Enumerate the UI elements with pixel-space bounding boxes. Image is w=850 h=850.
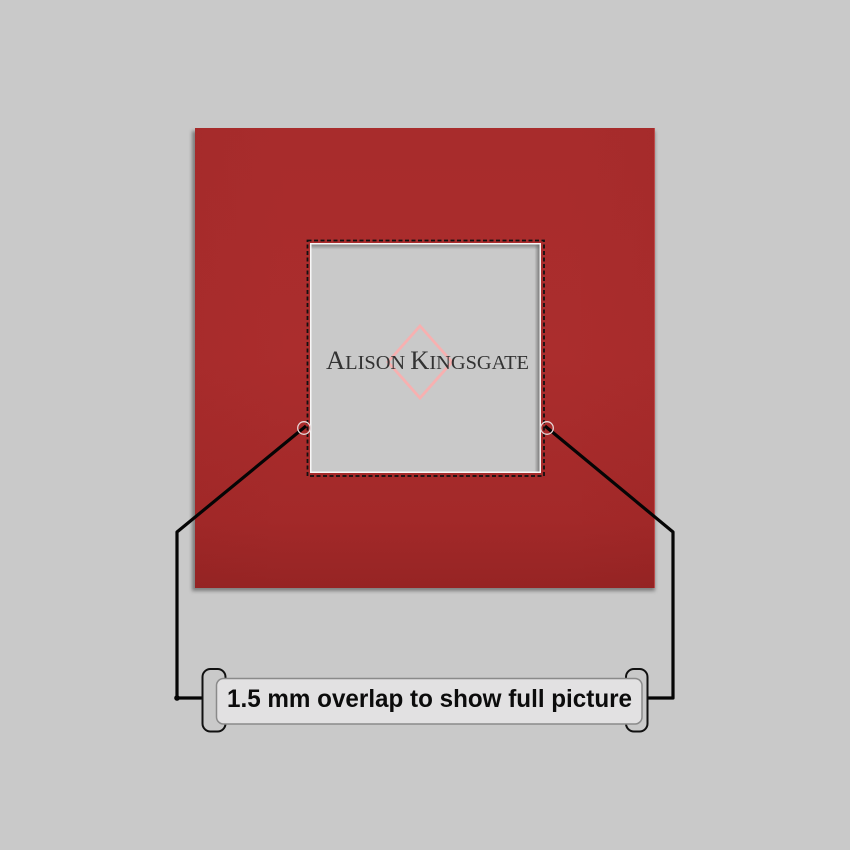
dashed outline: picture edge behind the mat: [308, 240, 544, 476]
bracket: right: [626, 669, 648, 732]
bracket: left: [202, 669, 226, 732]
callout label: [216, 678, 642, 724]
marker circle: right: [541, 422, 553, 434]
leader line: right: [541, 422, 673, 698]
mat window opening: [310, 243, 541, 473]
logo wordmark: ALISON KINGSGATE: [326, 346, 529, 375]
callout text: 1.5 mm overlap to show full picture: [227, 685, 632, 713]
logo: Alison Kingsgate: [326, 326, 529, 398]
marker circle: left: [298, 422, 310, 434]
leader line: left: [174, 422, 310, 701]
panel: red mat board: [192, 128, 655, 591]
logo diamond: [388, 326, 452, 398]
